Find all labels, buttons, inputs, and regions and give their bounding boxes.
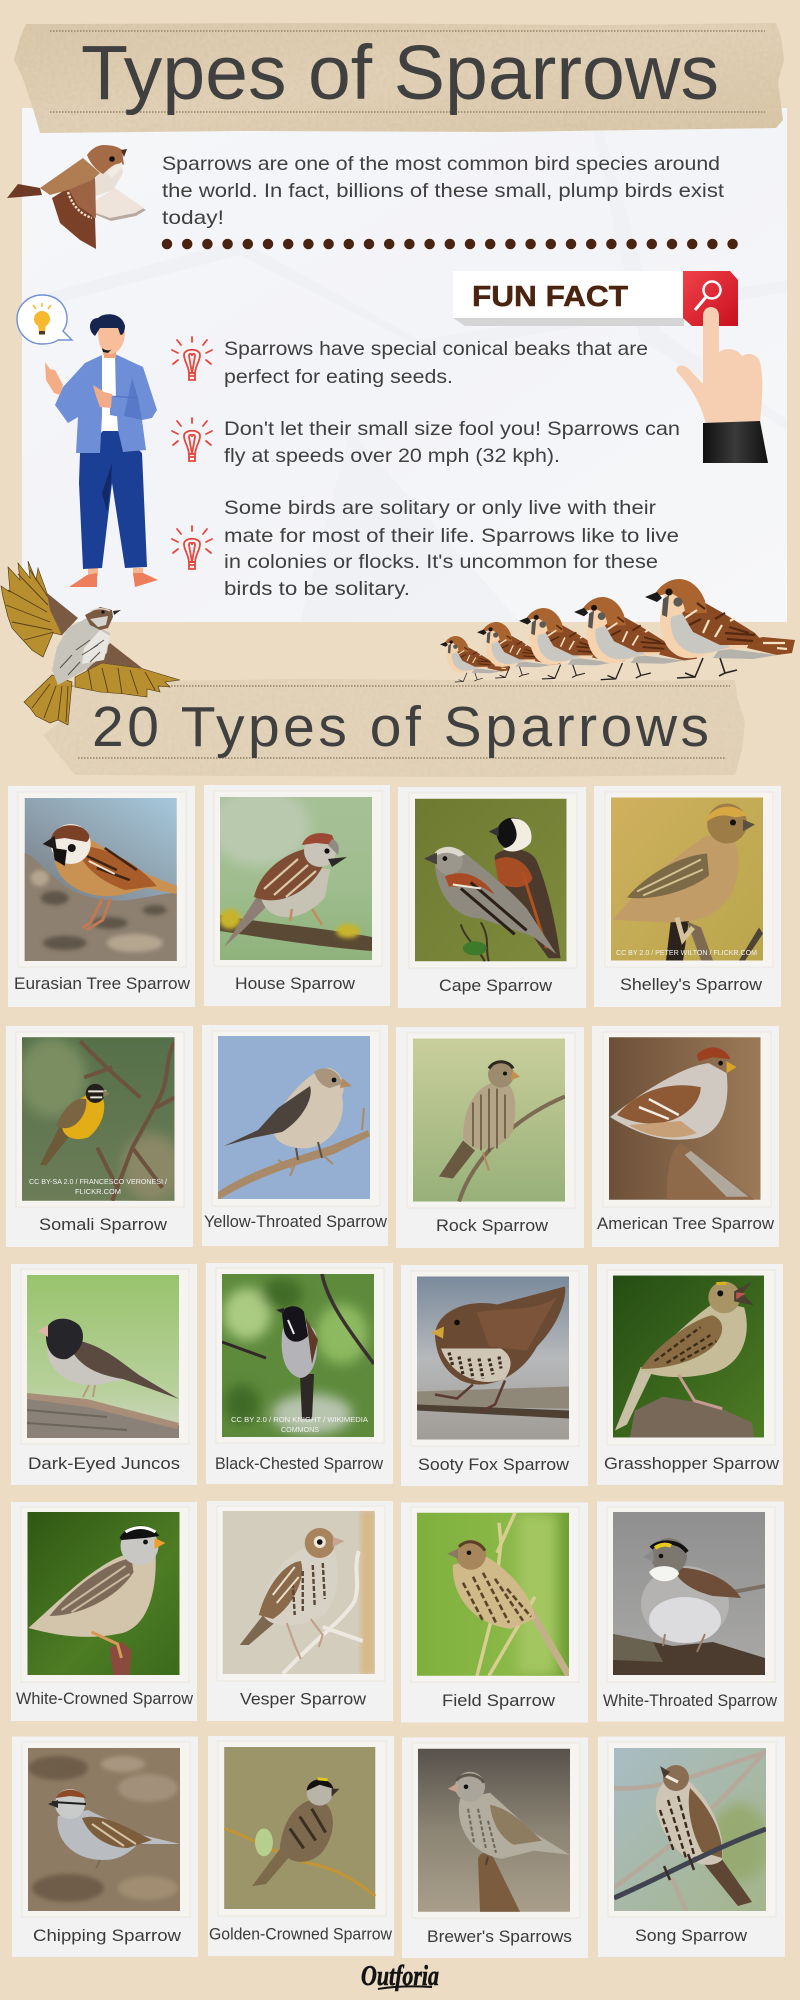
person with idea bubble (17, 295, 158, 587)
card: Dark-Eyed Juncos (11, 1264, 197, 1485)
card: Field Sparrow (401, 1502, 588, 1722)
photo (28, 1512, 180, 1675)
photo credit: COMMONS (281, 1425, 319, 1434)
photo (218, 1036, 370, 1199)
caption: Grasshopper Sparrow (604, 1455, 779, 1473)
fact 2: Don't let their small size fool you! Sparrows can (224, 418, 680, 440)
photo credit: CC BY 2.0 / RON KNIGHT / WIKIMEDIA (231, 1415, 368, 1424)
intro text: the world. In fact, billions of these small, plump birds exist (162, 180, 725, 202)
fact 3: mate for most of their life. Sparrows like to live (224, 525, 679, 547)
caption: Sooty Fox Sparrow (418, 1456, 569, 1474)
fun fact search bar: FUN FACT (472, 281, 628, 313)
idea bubble (17, 295, 72, 344)
card: Vesper Sparrow (207, 1501, 393, 1721)
hands (45, 362, 63, 395)
card: Shelley's Sparrow (594, 786, 781, 1007)
card: Sooty Fox Sparrow (401, 1265, 588, 1486)
photo (614, 1748, 766, 1911)
caption: Song Sparrow (635, 1927, 747, 1945)
caption: House Sparrow (235, 975, 355, 993)
icon: sitting sparrow (7, 145, 146, 249)
pointing hand (676, 307, 768, 463)
head (85, 607, 113, 630)
fact 3: birds to be solitary. (224, 578, 410, 600)
photo credit (29, 1177, 168, 1196)
fact 3: in colonies or flocks. It's uncommon for these (224, 551, 658, 573)
photo (222, 1511, 375, 1674)
title: Types of Sparrows (81, 30, 719, 116)
fun fact search bar (453, 271, 738, 326)
second title: 20 Types of Sparrows (92, 695, 709, 759)
caption: Vesper Sparrow (240, 1690, 366, 1708)
photo (415, 798, 566, 962)
fact 2: fly at speeds over 20 mph (32 kph). (224, 445, 560, 467)
fact icon: bulb 3 (172, 526, 212, 569)
body (52, 618, 110, 685)
fact 2 (224, 418, 680, 467)
photo (22, 1037, 174, 1201)
logo: Outforia: Outforia (361, 1960, 439, 1992)
card: American Tree Sparrow (592, 1026, 779, 1247)
fact 3 (224, 497, 679, 600)
photo (413, 1038, 565, 1202)
card: Rock Sparrow (396, 1027, 584, 1248)
caption: American Tree Sparrow (597, 1215, 774, 1233)
trousers (79, 431, 147, 569)
intro text: today! (162, 207, 224, 229)
card: Brewer's Sparrows (402, 1738, 588, 1958)
right wing (75, 663, 180, 697)
tail (24, 675, 72, 725)
card: Cape Sparrow (398, 787, 586, 1008)
photo (613, 1512, 765, 1675)
intro text (162, 153, 725, 229)
fact icon: bulb 1 (172, 337, 212, 380)
shoes and ankles (88, 568, 143, 576)
card: Grasshopper Sparrow (597, 1264, 783, 1485)
caption: Brewer's Sparrows (427, 1928, 572, 1946)
card: Song Sparrow (598, 1736, 785, 1957)
dotted divider (167, 239, 735, 249)
photo credit (231, 1415, 368, 1434)
caption: Cape Sparrow (439, 977, 552, 995)
fact 1: Sparrows have special conical beaks that are (224, 338, 648, 360)
caption: Golden-Crowned Sparrow (209, 1926, 392, 1944)
card: House Sparrow (204, 785, 390, 1006)
jacket (55, 355, 102, 453)
photo (24, 798, 177, 961)
photo (222, 1274, 374, 1437)
photo (609, 1037, 760, 1200)
title banner (10, 20, 790, 136)
photo credit: CC BY 2.0 / PETER WILTON / FLICKR.COM (616, 948, 757, 957)
shirt (102, 355, 118, 431)
photo (27, 1275, 179, 1438)
photo (418, 1748, 570, 1912)
photo credit: CC BY-SA 2.0 / FRANCESCO VERONESI / (29, 1177, 168, 1186)
intro text: Sparrows are one of the most common bird species around (162, 153, 720, 175)
caption: Eurasian Tree Sparrow (14, 975, 190, 993)
photo credit: FLICKR.COM (75, 1187, 121, 1196)
caption: Black-Chested Sparrow (215, 1455, 383, 1473)
card: Chipping Sparrow (12, 1736, 198, 1957)
caption: Shelley's Sparrow (620, 976, 762, 994)
card: Somali Sparrow (6, 1026, 193, 1247)
icon: flying sparrow (1, 561, 180, 725)
head (102, 344, 116, 358)
photo (28, 1748, 180, 1911)
fact icon: bulb 2 (172, 418, 212, 461)
photo (224, 1747, 376, 1909)
card: White-Throated Sparrow (597, 1502, 784, 1722)
second title banner (40, 676, 750, 780)
card: Yellow-Throated Sparrow (202, 1025, 388, 1246)
card: White-Crowned Sparrow (11, 1502, 197, 1721)
caption: Dark-Eyed Juncos (28, 1455, 180, 1473)
photo (613, 1276, 764, 1438)
left wing (1, 561, 62, 657)
caption: Field Sparrow (442, 1692, 555, 1710)
fact 3: Some birds are solitary or only live with their (224, 497, 657, 519)
panel: introduction paper (22, 108, 787, 622)
fact 1 (224, 338, 648, 388)
card: Golden-Crowned Sparrow (208, 1736, 394, 1956)
card: Eurasian Tree Sparrow (8, 786, 195, 1007)
caption: Rock Sparrow (436, 1217, 548, 1235)
photo (417, 1512, 569, 1676)
caption: White-Throated Sparrow (603, 1692, 777, 1710)
caption: Somali Sparrow (39, 1216, 167, 1234)
photo (417, 1276, 569, 1440)
caption: Yellow-Throated Sparrow (204, 1213, 387, 1231)
photo (220, 797, 372, 960)
card: Black-Chested Sparrow (206, 1263, 393, 1484)
caption: Chipping Sparrow (33, 1927, 181, 1945)
row of five sparrows (440, 579, 795, 682)
photo (611, 798, 763, 960)
fact 1: perfect for eating seeds. (224, 366, 453, 388)
caption: White-Crowned Sparrow (16, 1690, 193, 1708)
